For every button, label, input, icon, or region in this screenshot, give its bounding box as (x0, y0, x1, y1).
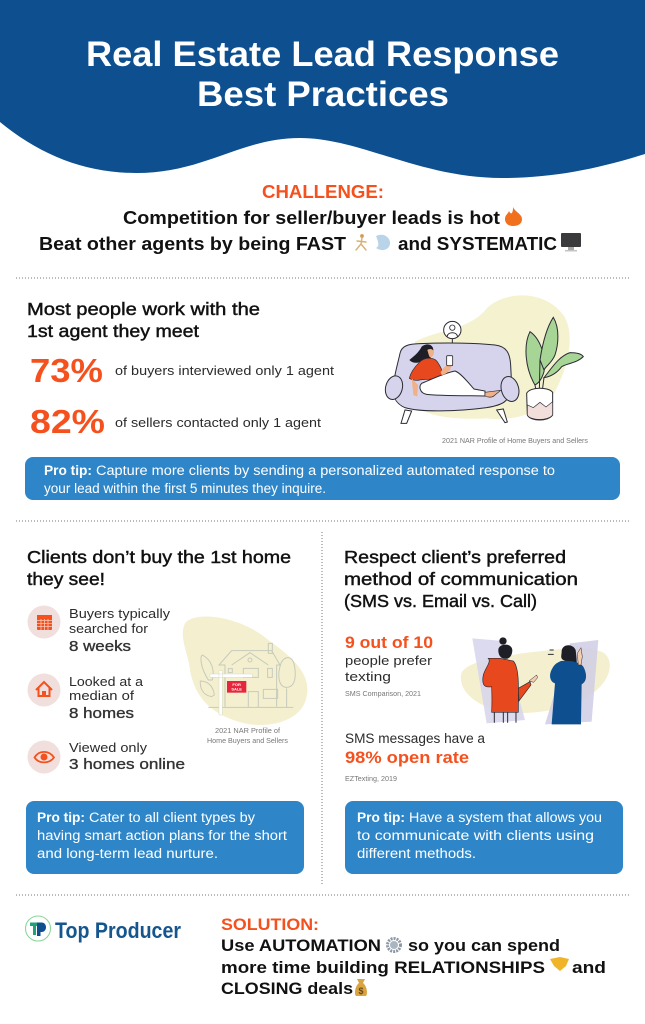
stat: 8 homes: 8 homes (69, 705, 134, 722)
heading: respect preferred communication: Respect client’s preferred (344, 547, 566, 567)
pro tip: different methods: different methods. (357, 846, 476, 861)
stat: 73 percent: 73% (30, 353, 103, 390)
stat: 73 percent (30, 353, 334, 390)
stat: 8 homes (69, 674, 144, 722)
illustration: house for sale: FOR (232, 682, 241, 687)
section: most people work with first agent: Most people work with the (27, 299, 260, 319)
solution text: Use AUTOMATION (221, 936, 381, 955)
heading: clients don't buy the first home (27, 547, 291, 589)
stat: 9 out of 10 (345, 633, 433, 698)
stat: 8 weeks: 8 weeks (69, 638, 131, 655)
challenge text: and SYSTEMATIC (398, 234, 557, 254)
stat: 98 percent open rate: 98% open rate (345, 748, 469, 767)
icon: money bag (355, 979, 367, 996)
source caption: home buyers and sellers (207, 726, 288, 745)
solution text: and (572, 958, 606, 977)
pro tip: smart action plans: and long-term lead nurture. (37, 846, 218, 861)
stat: 9 out of 10: people prefer (345, 653, 433, 668)
heading: respect preferred communication: method of communication (344, 569, 578, 589)
title (86, 35, 559, 114)
stat: 8 homes: Looked at a (69, 674, 144, 689)
solution text: so you can spend (408, 936, 560, 955)
solution text: more time building RELATIONSHIPS (221, 958, 545, 977)
pro tip: smart action plans: having smart action plans for the short (37, 828, 287, 843)
stat: 8 weeks (69, 606, 171, 655)
solution text (221, 915, 606, 998)
illustration: house for sale (183, 617, 307, 725)
icon: runner (356, 235, 366, 250)
stat: 8 weeks: Buyers typically (69, 606, 171, 621)
stat: 3 homes online (69, 740, 185, 773)
heading: clients don't buy the first home: Clients don’t buy the 1st home (27, 547, 291, 567)
illustration: woman on couch with plant (383, 295, 583, 423)
pro tip: different methods: Have a system that allows you (409, 810, 602, 825)
illustration: house for sale: SALE (231, 687, 242, 692)
stat: 8 weeks: searched for (69, 621, 149, 636)
icon: gear (388, 938, 400, 952)
stat: 98 percent open rate: SMS messages have a (345, 731, 485, 746)
stat: 73 percent: of buyers interviewed only 1 agent (115, 363, 334, 378)
solution text: SOLUTION: (221, 915, 319, 934)
source caption: NAR profile: 2021 NAR Profile of Home Buyers and Sellers (442, 436, 588, 445)
icon: computer (561, 233, 581, 252)
pro tip: personalized automated response: your lead within the first 5 minutes they inquire. (44, 481, 326, 496)
pro tip: different methods: Pro tip: (357, 810, 405, 825)
title: Best Practices (197, 75, 449, 114)
pro tip: smart action plans: Pro tip: (37, 810, 85, 825)
source caption: home buyers and sellers: 2021 NAR Profile of (215, 726, 281, 735)
stat: 82 percent: of sellers contacted only 1 agent (115, 415, 321, 430)
icon: dash cloud (376, 235, 390, 250)
pro tip: different methods (345, 801, 623, 874)
icon: home (28, 674, 60, 706)
pro tip: personalized automated response (25, 457, 620, 500)
solution text: CLOSING deals (221, 979, 353, 998)
pro tip: personalized automated response: Pro tip: (44, 463, 92, 478)
section: most people work with first agent: 1st agent they meet (27, 321, 199, 341)
stat: 9 out of 10: SMS Comparison, 2021 (345, 689, 421, 698)
icon: money bag: $ (358, 986, 364, 996)
icon: eye (28, 740, 60, 774)
stat: 98 percent open rate (345, 731, 485, 783)
title: Real Estate Lead Response (86, 35, 559, 74)
stat: 82 percent: 82% (30, 404, 105, 441)
stat: 3 homes online: 3 homes online (69, 756, 185, 773)
challenge text: Competition for seller/buyer leads is hot (123, 208, 500, 228)
heading: clients don't buy the first home: they see! (27, 569, 105, 589)
icon: handshake (550, 957, 569, 971)
source caption: home buyers and sellers: Home Buyers and Sellers (207, 736, 288, 745)
stat: 9 out of 10: texting (345, 669, 391, 684)
stat: 82 percent (30, 404, 321, 441)
icon: calendar (28, 606, 60, 638)
illustration: two people talking (461, 637, 610, 724)
heading: respect preferred communication: (SMS vs. Email vs. Call) (344, 591, 537, 611)
challenge text: CHALLENGE: (262, 182, 384, 202)
icon: fire (505, 207, 522, 226)
challenge text (39, 182, 557, 254)
challenge text: Beat other agents by being FAST (39, 234, 346, 254)
stat: 3 homes online: Viewed only (69, 740, 148, 755)
stat: 8 homes: median of (69, 688, 134, 703)
logo: Top Producer (26, 916, 181, 943)
stat: 9 out of 10: 9 out of 10 (345, 633, 433, 652)
pro tip: different methods: to communicate with clients using (357, 828, 594, 843)
logo: Top Producer: Top Producer (55, 918, 181, 943)
stat: 98 percent open rate: EZTexting, 2019 (345, 774, 397, 783)
header banner (0, 0, 645, 178)
heading: respect preferred communication (344, 547, 578, 611)
pro tip: smart action plans (26, 801, 304, 874)
pro tip: smart action plans: Cater to all client types by (89, 810, 255, 825)
section: most people work with first agent (27, 299, 260, 341)
pro tip: personalized automated response: Capture more clients by sending a personalized automated response to (96, 463, 555, 478)
